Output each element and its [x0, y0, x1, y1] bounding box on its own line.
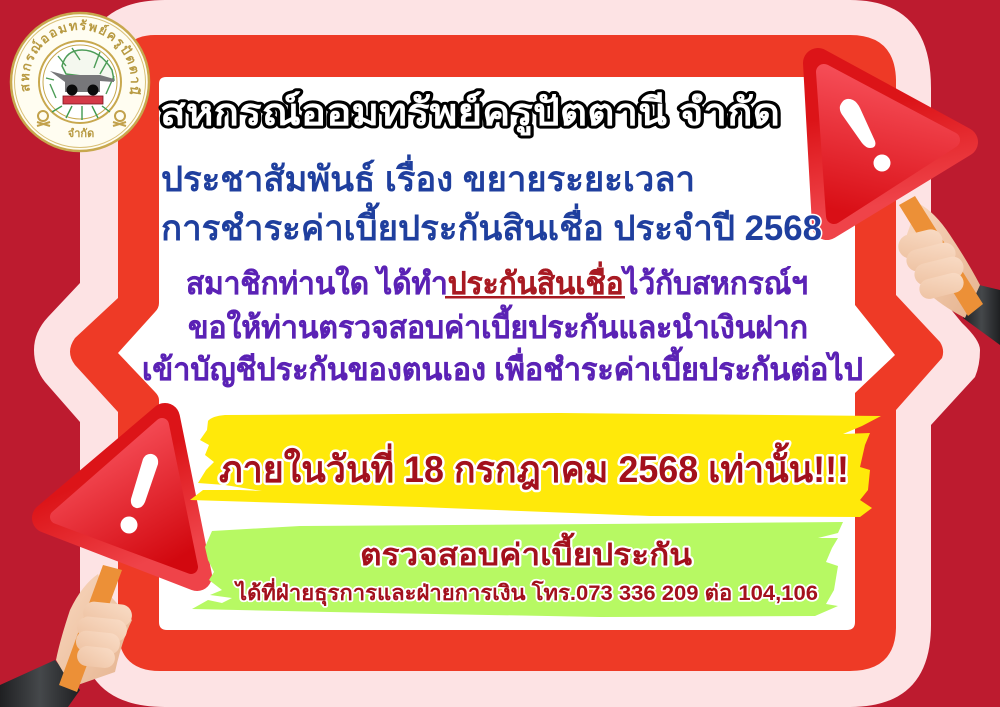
left sleeve: [0, 660, 80, 707]
right handle: [899, 196, 983, 316]
green contact banner: [192, 522, 843, 617]
logo: limited label: จำกัด: [68, 127, 94, 140]
logo: base: [63, 96, 103, 104]
logo: left ornament: [37, 111, 50, 126]
announcement heading: ประชาสัมพันธ์ เรื่อง ขยายระยะเวลา: [161, 154, 695, 199]
member notice: [142, 261, 863, 388]
white content panel: [118, 77, 895, 630]
right warning sign: [818, 63, 963, 225]
right fingers: [896, 227, 966, 301]
right sleeve: [963, 284, 1000, 345]
left sign face: [57, 425, 191, 567]
right hand holding sign: [896, 196, 1000, 345]
left fingers: [75, 601, 133, 669]
logo: right ornament: [113, 111, 126, 126]
deadline text: ภายในวันที่ 18 กรกฎาคม 2568 เท่านั้น!!!: [219, 442, 849, 490]
right exclamation mark: [840, 99, 890, 172]
logo: foliage: [46, 48, 114, 98]
logo: cannon: [50, 71, 114, 96]
member notice: ขอให้ท่านตรวจสอบค่าเบี้ยประกันและนำเงินฝาก: [188, 304, 808, 345]
announcement heading: [161, 154, 822, 248]
underline: [445, 296, 625, 298]
check heading: ตรวจสอบค่าเบี้ยประกัน: [360, 532, 693, 572]
left exclamation mark: [120, 454, 158, 534]
announcement heading: การชำระค่าเบี้ยประกันสินเชื่อ ประจำปี 2568: [161, 202, 822, 248]
left handle: [59, 565, 122, 692]
contact text: ได้ที่ฝ่ายธุรการและฝ่ายการเงิน โทร.073 336 209 ต่อ 104,106: [234, 577, 818, 607]
left hand holding sign: [0, 565, 133, 707]
logo: hill: [62, 50, 114, 80]
red inner frame: [70, 35, 943, 671]
member notice: สมาชิกท่านใด ได้ทำประกันสินเชื่อไว้กับสหกรณ์ฯ: [186, 261, 808, 301]
member notice: เข้าบัญชีประกันของตนเอง เพื่อชำระค่าเบี้ยประกันต่อไป: [142, 346, 863, 388]
left warning sign: [47, 418, 197, 576]
title: สหกรณ์ออมทรัพย์ครูปัตตานี จำกัด: [160, 91, 780, 136]
right palm: [905, 203, 980, 318]
left palm: [56, 574, 132, 687]
left sign border: [47, 418, 197, 576]
logo: rays: [52, 106, 110, 120]
right sign face: [824, 72, 952, 216]
logo: [10, 12, 150, 152]
right sign border: [818, 63, 963, 225]
yellow date banner: [190, 413, 881, 517]
logo: ring name: สหกรณ์ออมทรัพย์ครูปัตตานี: [21, 19, 141, 94]
